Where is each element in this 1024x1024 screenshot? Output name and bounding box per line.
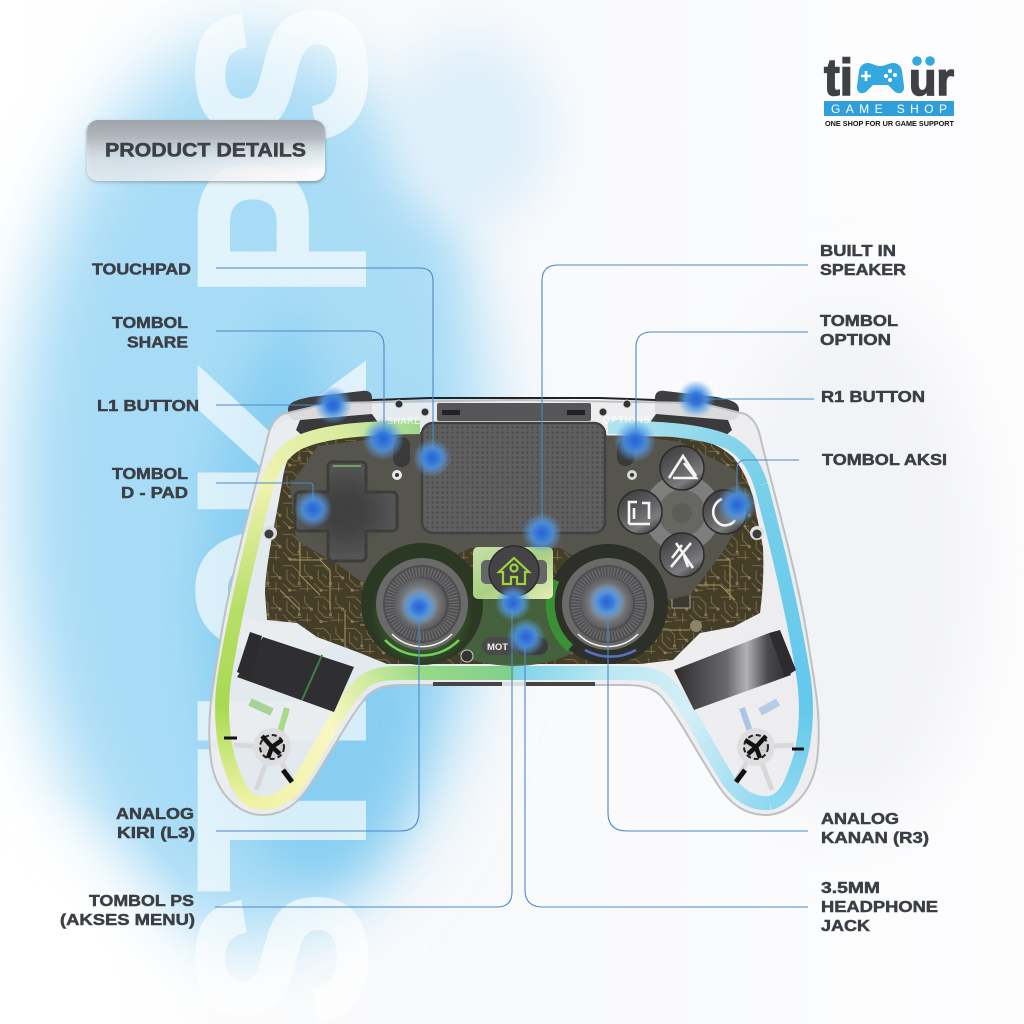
label: headphone jack (821, 880, 938, 935)
background lettering: STICK PS (149, 4, 414, 1024)
central plate (290, 434, 748, 604)
callout lines (215, 265, 814, 907)
label: touchpad: TOUCHPAD (92, 262, 191, 278)
mot button (482, 637, 516, 655)
label: tombol d-pad: TOMBOL (112, 466, 188, 483)
label: analog kiri: KIRI (L3) (117, 825, 195, 842)
label: r1 button: R1 BUTTON (821, 389, 925, 406)
right shoulder button R1 (655, 391, 739, 420)
right grip flex cable (742, 702, 778, 746)
button: cross (660, 533, 704, 577)
icon: house (499, 558, 529, 584)
plate centre (672, 503, 692, 523)
LED strip right (514, 427, 806, 803)
hotspot markers (294, 380, 757, 656)
mot button: MOT (487, 642, 508, 653)
logo word: ti (824, 49, 853, 107)
background lettering: STICK PS: K (151, 364, 414, 521)
label: tombol option: TOMBOL (820, 313, 898, 330)
label: tombol ps (60, 893, 195, 929)
label: analog kanan: ANALOG (821, 811, 899, 828)
background lettering: STICK PS: I (149, 689, 414, 753)
controller (209, 391, 819, 815)
button: square (618, 490, 662, 534)
options label on controller: OPTIONS (603, 415, 650, 425)
heading badge: product details (87, 120, 325, 181)
label: tombol ps: (AKSES MENU) (60, 912, 195, 929)
share label on controller: SHARE (387, 416, 420, 426)
label: tombol option (820, 313, 898, 349)
LED strip left (222, 427, 514, 803)
background lettering: STICK PS: C (150, 529, 414, 659)
label: built in speaker: BUILT IN (820, 243, 896, 260)
touchpad (422, 423, 605, 533)
background lettering: STICK PS: S (151, 4, 414, 143)
label: analog kanan (821, 811, 929, 847)
background lettering: STICK PS: T (149, 750, 414, 891)
label: analog kiri: ANALOG (116, 806, 194, 823)
heading badge: product details: PRODUCT DETAILS (105, 140, 306, 162)
logo: timur game shop (824, 49, 954, 128)
background lettering: STICK PS: P (151, 159, 414, 298)
d-pad (295, 462, 397, 561)
controller body shell (209, 400, 819, 815)
top edge line (372, 398, 655, 400)
left and right board screws (263, 470, 764, 662)
left grip screw hub (224, 728, 292, 790)
background lettering: STICK PS: S (151, 892, 414, 1024)
label: tombol d-pad (112, 466, 188, 502)
turbo button (515, 637, 548, 655)
options button (617, 440, 634, 466)
right grip screw hub (736, 728, 804, 790)
label: tombol option: OPTION (820, 332, 891, 349)
logo band: GAME SHOP (831, 102, 947, 116)
label: tombol aksi: TOMBOL AKSI (822, 452, 947, 469)
label: tombol share: SHARE (127, 334, 188, 352)
button: triangle (660, 446, 704, 490)
label: headphone jack: HEADPHONE (821, 899, 938, 916)
icon: gamepad (857, 63, 904, 93)
bottom centre bar (433, 682, 595, 686)
label: tombol d-pad: D - PAD (121, 485, 188, 502)
label: analog kiri (116, 806, 195, 842)
home button (473, 546, 553, 599)
label: headphone jack: JACK (821, 918, 871, 935)
label: tombol ps: TOMBOL PS (89, 893, 194, 910)
shoulder mechanics (296, 414, 732, 438)
left shoulder button L1 (288, 391, 372, 420)
action button ring plate (651, 482, 713, 544)
centre green glow (432, 578, 596, 666)
label: tombol share (112, 315, 188, 352)
label: tombol share: TOMBOL (112, 315, 188, 332)
label: analog kanan: KANAN (R3) (821, 830, 929, 847)
right analog stick (548, 544, 668, 664)
circuit board (260, 425, 770, 670)
share button (393, 437, 410, 467)
touchpad top bar (437, 403, 591, 421)
label: built in speaker (820, 243, 906, 279)
left grip flex cable (250, 702, 287, 746)
left grip motor (237, 632, 354, 712)
logo tagline: ONE SHOP FOR UR GAME SUPPORT (825, 119, 954, 128)
label: built in speaker: SPEAKER (820, 262, 906, 279)
logo word: ur (909, 53, 954, 105)
label: headphone jack: 3.5MM (821, 880, 880, 897)
button: circle (703, 490, 747, 534)
label: l1 button: L1 BUTTON (97, 398, 199, 415)
top screws (395, 400, 631, 416)
logo word (824, 49, 954, 107)
right grip motor (674, 630, 796, 710)
left analog stick (361, 543, 483, 666)
